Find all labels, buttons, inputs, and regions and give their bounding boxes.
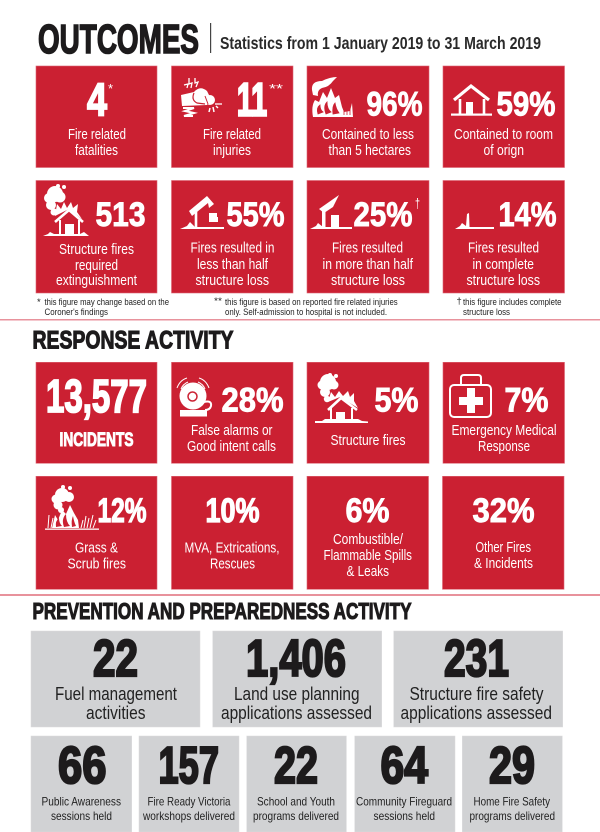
panel: false alarms: [172, 362, 293, 463]
icon: alarm bell: [177, 378, 211, 416]
panel: fuel management activities: activities: [86, 702, 146, 723]
footnote: fatalities: Coroner's findings: [44, 307, 108, 318]
panel: land use planning applications: 1,406: [246, 630, 346, 688]
panel: structure fires: 5%: [374, 382, 418, 420]
panel: fuel management activities: 22: [93, 630, 138, 688]
panel: more than half structure loss: 25%: [354, 196, 412, 234]
panel: total incidents: 13,577: [46, 370, 147, 422]
panel: fire related injuries: injuries: [213, 142, 251, 159]
panel: fire related fatalities: fatalities: [75, 142, 118, 159]
panel: more than half structure loss: †: [415, 195, 420, 211]
panel: home fire safety programs: [462, 736, 562, 832]
panel: false alarms: 28%: [222, 382, 284, 420]
panel: complete structure loss: in complete: [472, 256, 534, 273]
footnote: structure loss: structure loss: [463, 307, 510, 318]
panel: emergency medical response: [443, 362, 564, 463]
panel: Fire Ready Victoria workshops: Fire Ready Victoria: [148, 795, 231, 809]
panel: MVA, extrications, rescues: 10%: [206, 492, 260, 530]
panel: fire related fatalities: [36, 66, 157, 168]
heading: response activity: RESPONSE ACTIVITY: [32, 326, 234, 354]
panel: Fire Ready Victoria workshops: 157: [158, 737, 219, 795]
panel: Fire Ready Victoria workshops: workshops delivered: [142, 809, 235, 823]
panel: less than half structure loss: [172, 180, 293, 293]
panel: contained to less than 5 hectares: than 5 hectares: [328, 142, 411, 159]
panel: structure fires required extinguishment: extinguishment: [56, 272, 138, 289]
footnote: injuries: [214, 296, 398, 318]
icon: first aid kit: [450, 375, 491, 417]
panel: emergency medical response: Response: [478, 438, 530, 455]
panel: land use planning applications: applications assessed: [221, 702, 372, 723]
panel: structure fires required extinguishment: Structure fires: [59, 241, 134, 258]
panel: total incidents: INCIDENTS: [60, 430, 134, 451]
panel: structure fire safety applications: [394, 630, 563, 727]
footnote: fatalities: this figure may change based on the: [44, 297, 169, 308]
panel: other fires and incidents: [442, 476, 564, 589]
panel: public awareness sessions: Public Awareness: [42, 795, 121, 809]
panel: grass and scrub fires: Scrub fires: [68, 556, 126, 573]
panel: land use planning applications: Land use planning: [234, 683, 360, 704]
panel: contained to less than 5 hectares: Contained to less: [322, 126, 414, 143]
panel: grass and scrub fires: Grass &: [75, 540, 118, 557]
panel: structure fires required extinguishment: 513: [96, 196, 146, 234]
icon: house with damaged room: [451, 86, 492, 116]
panel: structure fire safety applications: applications assessed: [400, 702, 552, 723]
panel: public awareness sessions: 66: [58, 737, 106, 795]
panel: community fireguard sessions: Community Fireguard: [356, 795, 452, 809]
footnote: structure loss: [456, 296, 562, 318]
panel: emergency medical response: 7%: [504, 382, 548, 420]
panel: structure fires: [307, 362, 429, 463]
panel: Fire Ready Victoria workshops: [139, 736, 239, 832]
panel: grass and scrub fires: 12%: [98, 492, 146, 530]
panel: home fire safety programs: Home Fire Safety: [474, 795, 550, 809]
panel: contained to less than 5 hectares: [307, 66, 429, 168]
panel: complete structure loss: Fires resulted: [468, 240, 539, 257]
footnote: fatalities: [37, 297, 169, 318]
footnote: structure loss: this figure includes complete: [463, 297, 562, 308]
panel: school and youth programs: School and Youth: [257, 795, 335, 809]
panel: MVA, extrications, rescues: MVA, Extrications,: [184, 540, 280, 557]
footnote: injuries: only. Self-admission to hospital is not included.: [225, 307, 387, 318]
panel: community fireguard sessions: sessions held: [374, 809, 435, 823]
panel: less than half structure loss: structure loss: [196, 272, 269, 289]
panel: false alarms: False alarms or: [191, 422, 273, 439]
panel: emergency medical response: Emergency Medical: [452, 422, 556, 439]
panel: MVA, extrications, rescues: [172, 476, 293, 589]
panel: structure fires: Structure fires: [330, 432, 406, 449]
panel: other fires and incidents: 32%: [472, 492, 534, 530]
panel: complete structure loss: [443, 180, 564, 293]
footnote: fatalities: *: [37, 297, 41, 308]
icon: house on fire: [315, 373, 368, 423]
title: Outcomes: OUTCOMES: [38, 16, 199, 62]
panel: public awareness sessions: sessions held: [51, 809, 112, 823]
panel: combustible spills and leaks: Flammable Spills: [324, 547, 412, 564]
panel: school and youth programs: [247, 736, 346, 832]
panel: less than half structure loss: less than half: [197, 256, 269, 273]
panel: combustible spills and leaks: [307, 476, 428, 589]
panel: combustible spills and leaks: & Leaks: [346, 563, 389, 580]
panel: less than half structure loss: 55%: [226, 196, 284, 234]
panel: more than half structure loss: structure loss: [331, 272, 405, 289]
panel: combustible spills and leaks: 6%: [346, 492, 390, 530]
panel: contained to room of origin: [443, 66, 564, 168]
panel: fire related injuries: [172, 66, 293, 168]
panel: structure fires required extinguishment: required: [75, 257, 118, 274]
panel: contained to room of origin: of orign: [484, 142, 524, 159]
icon: injured person: [181, 78, 222, 116]
panel: fire related fatalities: Fire related: [68, 126, 126, 143]
panel: fuel management activities: Fuel management: [55, 683, 177, 704]
panel: community fireguard sessions: 64: [380, 737, 428, 795]
panel: community fireguard sessions: [355, 736, 455, 832]
panel: fire related injuries: 11: [237, 74, 267, 126]
panel: school and youth programs: programs delivered: [253, 809, 339, 823]
icon: house on fire: [43, 184, 89, 236]
panel: other fires and incidents: Other Fires: [476, 539, 531, 556]
heading: prevention and preparedness activity: PREVENTION AND PREPAREDNESS ACTIVITY: [32, 598, 412, 624]
panel: MVA, extrications, rescues: Rescues: [210, 556, 255, 573]
footnote: injuries: **: [214, 296, 222, 307]
panel: less than half structure loss: Fires resulted in: [190, 240, 274, 257]
panel: complete structure loss: 14%: [498, 196, 556, 234]
icon: heavily damaged house: [310, 195, 352, 229]
icon: bushfire: [312, 77, 353, 117]
panel: more than half structure loss: in more than half: [322, 256, 414, 273]
panel: home fire safety programs: 29: [489, 737, 535, 795]
panel: land use planning applications: [213, 630, 382, 727]
icon: grass fire: [45, 485, 99, 530]
footnote: structure loss: †: [456, 296, 462, 307]
icon: partly damaged house: [180, 196, 224, 229]
panel: total incidents: [36, 362, 157, 463]
panel: contained to room of origin: Contained to room: [454, 126, 553, 143]
panel: contained to less than 5 hectares: 96%: [366, 86, 422, 124]
panel: fire related fatalities: 4: [87, 74, 107, 126]
panel: fire related fatalities: *: [108, 81, 113, 96]
footnote: injuries: this figure is based on reported fire related injuries: [225, 297, 398, 308]
panel: fire related injuries: **: [269, 81, 283, 96]
panel: fire related injuries: Fire related: [203, 126, 261, 143]
icon: destroyed house: [455, 213, 494, 229]
panel: more than half structure loss: [307, 180, 429, 293]
panel: other fires and incidents: & Incidents: [474, 555, 533, 572]
panel: structure fire safety applications: Structure fire safety: [410, 683, 544, 704]
panel: grass and scrub fires: [36, 476, 157, 589]
panel: more than half structure loss: Fires resulted: [332, 240, 403, 257]
panel: structure fire safety applications: 231: [444, 630, 509, 688]
panel: public awareness sessions: [31, 736, 132, 832]
panel: home fire safety programs: programs delivered: [470, 809, 555, 823]
panel: structure fires required extinguishment: [36, 180, 157, 293]
panel: false alarms: Good intent calls: [187, 438, 276, 455]
panel: combustible spills and leaks: Combustible/: [333, 531, 404, 548]
panel: contained to room of origin: 59%: [496, 86, 556, 124]
panel: school and youth programs: 22: [274, 737, 318, 795]
panel: fuel management activities: [31, 630, 200, 727]
panel: complete structure loss: structure loss: [466, 272, 540, 289]
